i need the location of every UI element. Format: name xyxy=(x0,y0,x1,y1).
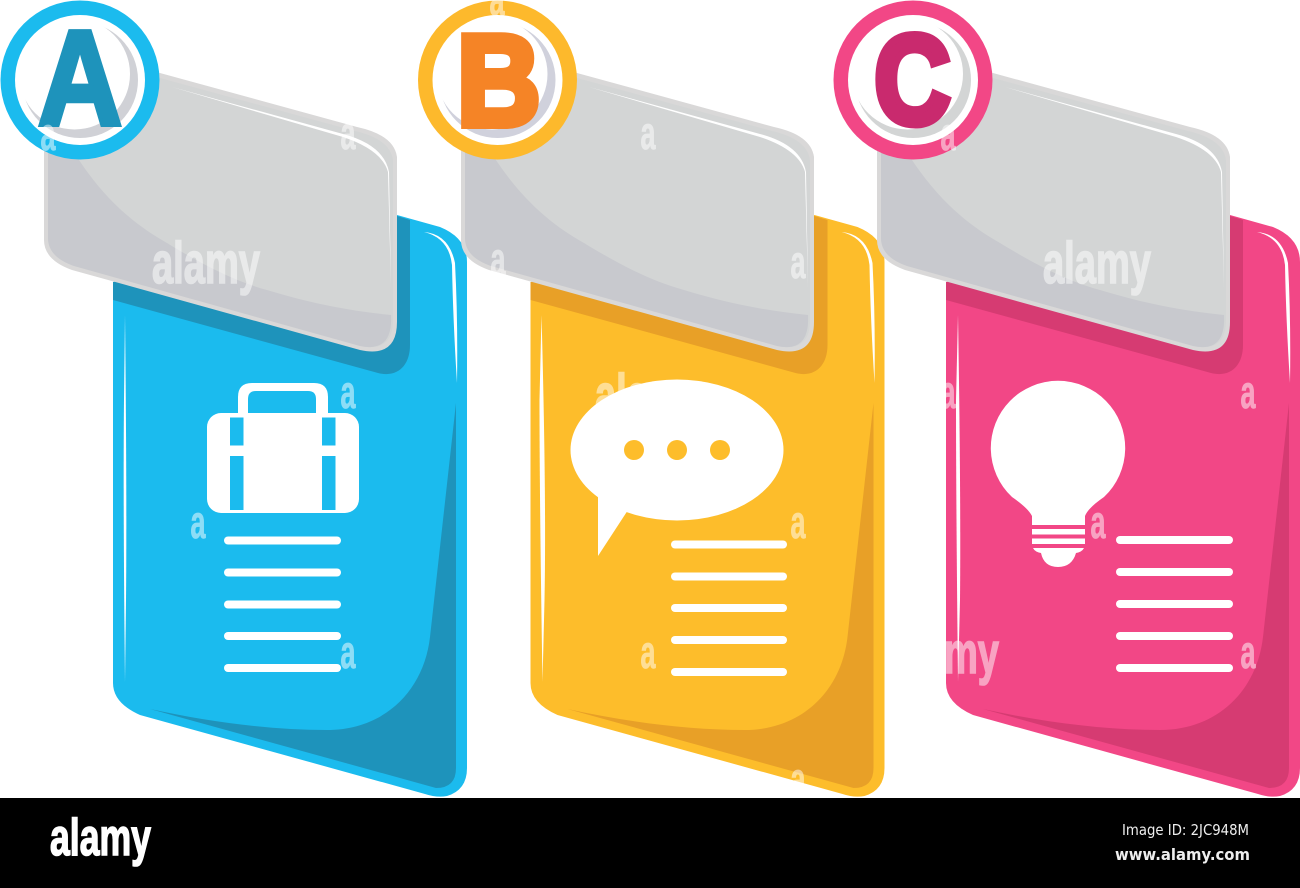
watermarks: alamy xyxy=(891,621,999,686)
watermarks: a xyxy=(940,366,956,418)
watermarks: a xyxy=(40,108,56,160)
text lines C xyxy=(1116,536,1233,672)
panel: grey header B xyxy=(461,73,814,351)
watermarks: a xyxy=(940,108,956,160)
text lines A xyxy=(224,536,341,672)
icon: speech bubble xyxy=(570,380,784,556)
letter B: B xyxy=(457,9,540,153)
card body C xyxy=(946,215,1300,797)
panel: card A xyxy=(113,215,467,797)
watermarks: a xyxy=(340,626,356,678)
badge A xyxy=(0,0,160,160)
panel: grey header A xyxy=(44,73,397,351)
panel: card C xyxy=(946,215,1300,797)
watermarks: a xyxy=(190,496,206,548)
watermarks: a xyxy=(790,496,806,548)
card body A xyxy=(113,215,467,797)
watermarks: a xyxy=(1240,107,1256,159)
image id: Image ID: 2JC948M xyxy=(1122,821,1249,839)
watermarks: a xyxy=(640,107,656,159)
icon: suitcase xyxy=(207,383,359,513)
letter C: C xyxy=(874,10,950,150)
watermarks: a xyxy=(490,233,506,285)
watermarks: a xyxy=(1090,496,1106,548)
card header shadow B xyxy=(530,216,828,374)
watermarks: a xyxy=(1240,626,1256,678)
card highlights C xyxy=(956,232,1290,682)
watermarks: a xyxy=(640,626,656,678)
watermarks: a xyxy=(790,753,806,805)
icon: light bulb xyxy=(991,381,1125,567)
badge C xyxy=(834,0,992,160)
watermark behind speech bubble: alamy xyxy=(595,363,703,428)
watermarks: a xyxy=(340,366,356,418)
badge B xyxy=(418,0,577,160)
card fold shadow A xyxy=(150,403,456,788)
panel: grey header C xyxy=(877,73,1230,351)
text lines B xyxy=(671,540,787,676)
website: www.alamy.com xyxy=(1115,845,1250,864)
card body B xyxy=(530,215,884,797)
letter A: A xyxy=(38,2,122,154)
watermarks: a xyxy=(790,236,806,288)
card highlights B xyxy=(540,232,875,682)
card header shadow C xyxy=(946,216,1243,374)
watermarks: a xyxy=(1240,366,1256,418)
footer logo: alamy xyxy=(50,809,151,867)
card fold shadow C xyxy=(983,403,1289,788)
panel: card B xyxy=(530,215,884,797)
card highlights A xyxy=(124,232,457,682)
watermarks: alamy xyxy=(1043,231,1151,296)
card fold shadow B xyxy=(568,403,874,788)
footer bar xyxy=(0,798,1300,888)
watermarks: a xyxy=(340,107,356,159)
card header shadow A xyxy=(113,216,410,374)
watermarks: alamy xyxy=(152,231,260,296)
